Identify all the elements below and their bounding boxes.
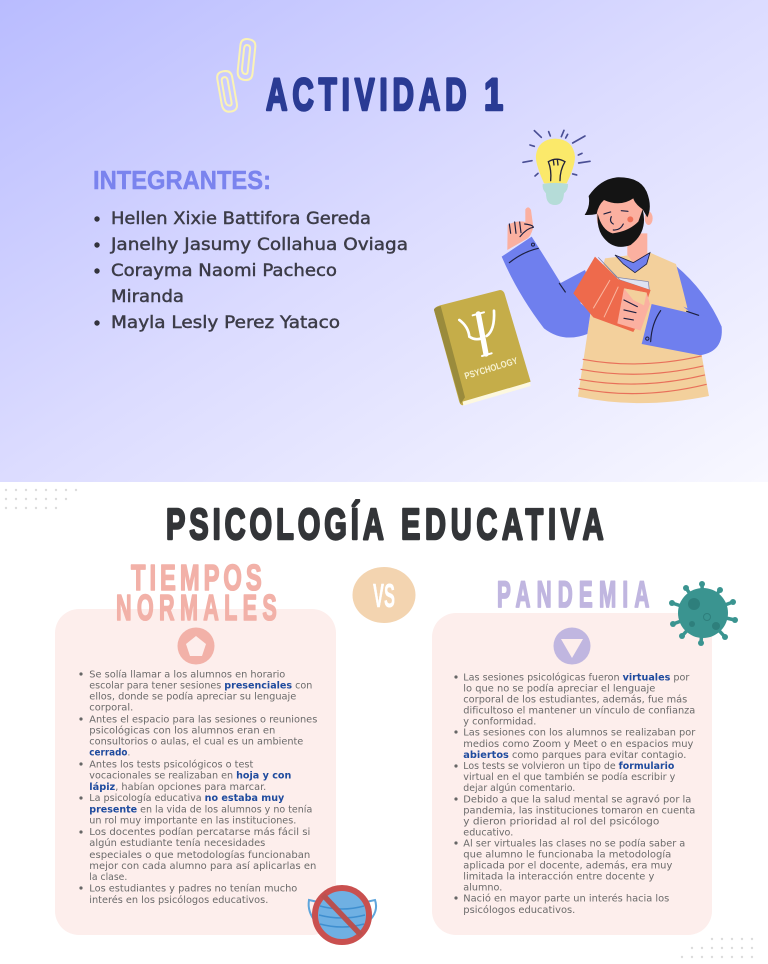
title: Psicología Educativa: EDUCATIVA [401, 499, 604, 548]
text: pandemia: virtual en el que también se podía escribir y [463, 771, 676, 783]
text: pandemia: Las sesiones psicológicas fueron virtuales por [463, 671, 689, 683]
heading: Pandemia: PANDEMIA [497, 575, 649, 616]
text: pandemia: corporal de los estudiantes, además, fue más [463, 693, 687, 705]
title: Psicología Educativa [166, 499, 604, 548]
text: tiempos normales: especiales o que metodologías funcionaban [89, 849, 310, 861]
text: tiempos normales: Se solía llamar a los alumnos en horario [89, 668, 285, 680]
text: pandemia: Debido a que la salud mental se agravó por la [463, 793, 691, 805]
text: tiempos normales: presente en la vida de los alumnos y no tenía [89, 804, 312, 816]
man: vest [578, 253, 709, 403]
panel: top background [0, 0, 768, 482]
text: pandemia: alumno. [463, 883, 502, 894]
text: tiempos normales: vocacionales se realizaban en hoja y con [89, 771, 291, 782]
text: tiempos normales: la clase. [89, 872, 127, 883]
text: pandemia: lo que no se podía apreciar el lenguaje [463, 682, 655, 694]
title: Psicología Educativa: PSICOLOGÍA [166, 499, 384, 548]
text: pandemia: medios como Zoom y Meet o en espacios muy [463, 739, 694, 750]
heading: Tiempos normales: TIEMPOS [131, 558, 262, 598]
text: pandemia: dificultoso el mantener un vínculo de confianza [463, 705, 695, 717]
list: integrantes: Miranda [111, 287, 184, 306]
text: pandemia: Nació en mayor parte un interés hacia los [463, 893, 669, 905]
text: pandemia: pandemia, las instituciones tomaron en cuenta [463, 805, 695, 816]
text: pandemia: abiertos como parques para evitar contagio. [463, 750, 686, 761]
text: tiempos normales: escolar para tener sesiones presenciales con [89, 681, 312, 692]
man: hair [585, 177, 650, 217]
text: tiempos normales: La psicología educativa no estaba muy [89, 792, 285, 804]
text: pandemia: que alumno le funcionaba la metodología [463, 848, 671, 860]
list: integrantes: Mayla Lesly Perez Yataco [111, 313, 340, 332]
text: tiempos normales: psicológicas con los alumnos eran en [89, 725, 275, 737]
text: tiempos normales: lápiz, habían opciones para marcar. [89, 781, 266, 793]
man: raised arm [502, 237, 591, 338]
illustration: man reading [502, 177, 722, 403]
text: pandemia: Las sesiones con los alumnos se realizaban por [463, 728, 695, 739]
list: integrantes: Janelhy Jasumy Collahua Oviaga [110, 235, 408, 254]
text: tiempos normales: Antes el espacio para las sesiones o reuniones [89, 715, 317, 726]
title: Actividad 1: ACTIVIDAD [266, 70, 467, 121]
text: tiempos normales: consultorios o aulas, el cual es un ambiente [89, 737, 303, 748]
man: open book [598, 257, 649, 290]
text: tiempos normales: un rol muy importante en las instituciones. [89, 816, 296, 827]
man: beard [597, 209, 644, 247]
panel: pandemia [432, 613, 712, 935]
badge: VS [352, 567, 416, 623]
man: forearm [642, 304, 722, 355]
text: pandemia: y dieron prioridad al rol del psicólogo [463, 815, 659, 827]
heading: Integrantes: INTEGRANTES: [93, 165, 271, 195]
text: tiempos normales: algún estudiante tenía necesidades [89, 837, 265, 849]
heading: Tiempos normales [116, 558, 277, 628]
text: pandemia: psicólogos educativos. [463, 904, 575, 916]
text: pandemia: aplicada por el docente, además, era muy [463, 860, 673, 872]
text: pandemia: educativo. [463, 827, 513, 838]
badge: VS: VS [373, 577, 395, 614]
icon: pentagon badge [178, 628, 214, 664]
decoration: dots bottom right [681, 938, 753, 958]
text: tiempos normales: interés en los psicólogos educativos. [89, 894, 268, 906]
heading: Tiempos normales: NORMALES [116, 588, 277, 628]
text: tiempos normales: cerrado. [89, 748, 130, 759]
icon: virus [669, 581, 738, 646]
icon: triangle badge [554, 628, 590, 664]
title: Actividad 1: 1 [484, 69, 503, 120]
illustration: light bulb [523, 130, 590, 205]
text: tiempos normales: mejor con cada alumno para así aplicarlas en [89, 860, 316, 872]
text: pandemia [454, 671, 695, 916]
icon: paperclips [216, 38, 256, 113]
text: tiempos normales: corporal. [89, 703, 133, 714]
man: hand holding book [617, 288, 650, 331]
text: pandemia: dejar algún comentario. [463, 782, 575, 794]
list: integrantes [94, 209, 408, 332]
man: raised hand [507, 207, 533, 250]
text: pandemia: y conformidad. [463, 717, 536, 728]
text: tiempos normales [79, 668, 317, 906]
panel: tiempos normales [55, 609, 336, 935]
text: tiempos normales: Los estudiantes y padres no tenían mucho [89, 882, 297, 894]
text: pandemia: Al ser virtuales las clases no se podía saber a [463, 837, 685, 849]
list: integrantes: Corayma Naomi Pacheco [111, 261, 337, 280]
illustration: psychology book: PSYCHOLOGY [463, 355, 519, 381]
man: neck and head [627, 233, 647, 263]
text: pandemia: Los tests se volvieron un tipo de formulario [463, 761, 675, 772]
text: pandemia: limitada la interacción entre docente y [463, 871, 655, 883]
man: back sleeve [675, 265, 722, 333]
text: tiempos normales: Antes los tests psicológicos o test [89, 759, 254, 771]
icon: no mask [309, 888, 376, 942]
decoration: dots top left [5, 489, 77, 509]
illustration: psychology book [434, 290, 531, 406]
list: integrantes: Hellen Xixie Battifora Gereda [111, 209, 371, 228]
text: tiempos normales: ellos, donde se podía apreciar su lenguaje [89, 691, 296, 703]
text: tiempos normales: Los docentes podían percatarse más fácil si [89, 826, 310, 838]
